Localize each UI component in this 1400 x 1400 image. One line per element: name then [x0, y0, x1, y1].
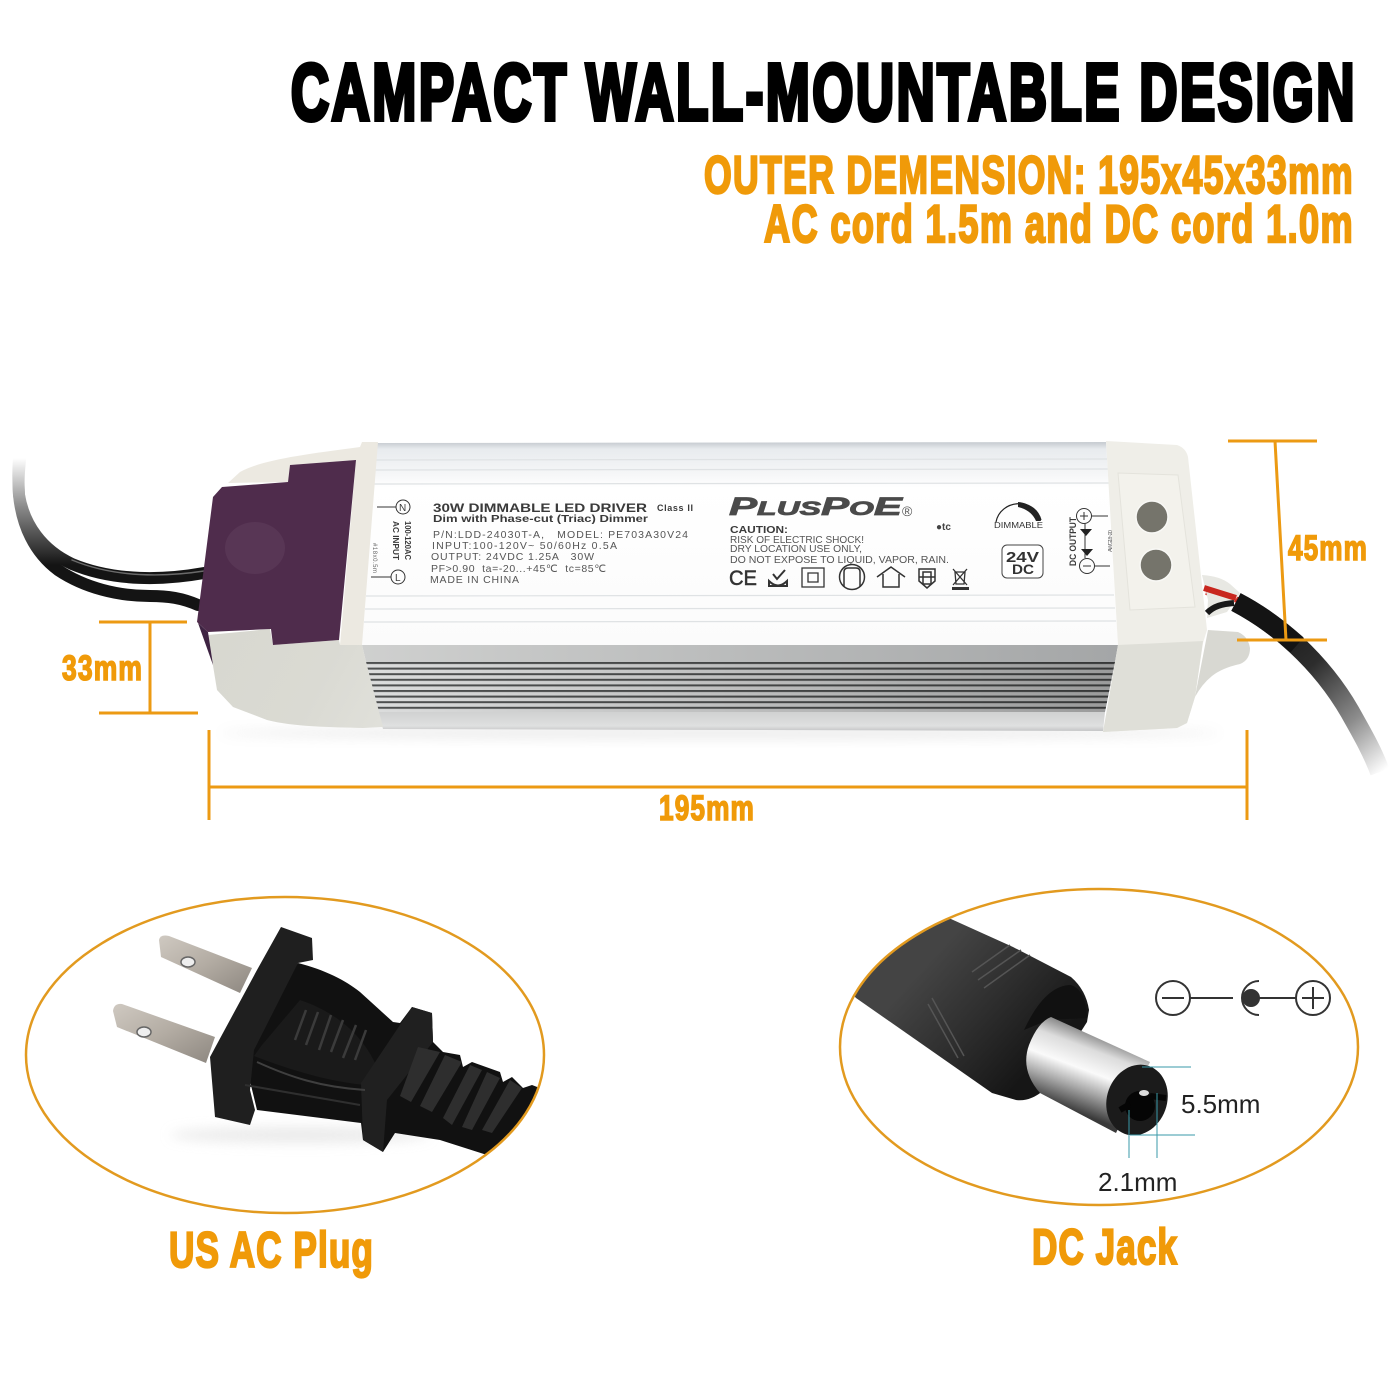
plug prong lower [113, 1004, 215, 1063]
jack ridge lines [928, 945, 1030, 1058]
label: AC input schematic: #18x0.5m [371, 543, 377, 573]
cable hole lower [1140, 549, 1172, 581]
dimension: 195mm length: 195mm [659, 789, 755, 828]
plug grip ribs [295, 1010, 366, 1060]
right cap mounting tab [1195, 630, 1250, 697]
icon: crossed-out bin [953, 569, 967, 585]
label: caution text: RISK OF ELECTRIC SHOCK! [730, 535, 864, 546]
label: 24V DC badge [1002, 545, 1043, 578]
icon: class II square [802, 568, 824, 587]
label: AC input schematic: AC INPUT [391, 521, 401, 561]
label: dimmable badge: DIMMABLE [994, 520, 1043, 530]
fin shading [366, 662, 1115, 712]
subtitle: dimensions and cord lengths [704, 146, 1354, 254]
icon: thermal mark [919, 569, 935, 588]
jack measurement guide lines [1129, 1067, 1195, 1158]
dimension: 45mm width: 45mm [1288, 529, 1368, 568]
right cap front shading [1103, 641, 1203, 732]
strain relief ribs [400, 1047, 522, 1133]
icon: polarity symbol [1156, 981, 1330, 1015]
aluminium grey band [362, 645, 1118, 662]
left cap upper part [228, 442, 378, 645]
logo registered mark: ® [902, 503, 913, 519]
label: product specification text: Class II [657, 503, 693, 513]
label: 2.1mm: 2.1mm [1098, 1167, 1177, 1197]
left cap lower part [208, 629, 383, 728]
dimension: 45mm width [1228, 441, 1368, 640]
icon: indoor house [877, 567, 905, 587]
label: AC input schematic: 100-120AC [403, 521, 413, 560]
label: product specification text: INPUT:100-120V~ 50/60Hz 0.5A [432, 540, 617, 552]
label: product specification text: Dim with Phase-cut (Triac) Dimmer [433, 513, 648, 525]
label: DC output schematic [1068, 508, 1114, 574]
jack ellipse outline [840, 889, 1358, 1205]
plug prong upper [159, 936, 252, 993]
dimension: 33mm height: 33mm [62, 649, 143, 688]
label: 5.5mm: 5.5mm [1181, 1089, 1260, 1119]
label: certification icons [729, 564, 969, 590]
plug black body [210, 927, 545, 1155]
label: product specification text: P/N:LDD-24030T-A, MODEL: PE703A30V24 [433, 529, 688, 541]
label: PlusPoE logo: P LUS P O E [729, 493, 904, 521]
right cap inset panel [1118, 473, 1195, 610]
aluminium top face [362, 442, 1118, 645]
tc point mark: ●tc [936, 522, 951, 533]
label: AC input schematic: L [395, 573, 401, 584]
label: product specification text: MADE IN CHINA [430, 574, 519, 586]
label: product specification text: PF>0.90 ta=-20...+45℃ tc=85℃ [431, 563, 606, 575]
icon: CE mark: CE [729, 567, 757, 590]
dimension: 195mm length [209, 730, 1247, 828]
driver body [197, 441, 1207, 732]
purple side shadow [198, 623, 213, 665]
icon: bin underline [952, 587, 969, 590]
label: caution text: CAUTION: [730, 524, 788, 536]
label: DC Jack: DC Jack [1032, 1219, 1178, 1275]
jack tip [1096, 1056, 1178, 1144]
plug ellipse outline [26, 897, 544, 1213]
label: AC input schematic: N [399, 503, 406, 514]
label: caution text: DO NOT EXPOSE TO LIQUID, VAPOR, RAIN. [730, 555, 949, 566]
label: caution text [730, 524, 949, 566]
purple connector cover [197, 460, 356, 645]
label: US AC Plug: US AC Plug [169, 1222, 374, 1278]
shadow under driver [220, 728, 1220, 738]
right end cap [1103, 441, 1207, 732]
label: 24V DC badge: DC [1012, 561, 1034, 577]
label: product specification text: OUTPUT: 24VDC 1.25A 30W [431, 551, 594, 563]
AC cable, left side [18, 458, 204, 605]
label: AC input schematic [371, 500, 413, 584]
icon: circled enclosure [840, 564, 864, 590]
panel: US AC plug [26, 897, 545, 1213]
DC cable, right side [1206, 592, 1380, 772]
aluminium lower silver edge [378, 712, 1105, 731]
jack black body [854, 918, 1089, 1100]
jack metal barrel [1026, 1017, 1150, 1133]
label: dimmable badge [994, 502, 1043, 530]
label: product specification text [430, 503, 693, 586]
panel: DC jack [840, 889, 1358, 1205]
red wire stub [1204, 588, 1236, 598]
black wire stub [1207, 603, 1234, 613]
jack collar [1024, 985, 1087, 1030]
label: product specification text: 30W DIMMABLE LED DRIVER [433, 503, 648, 515]
cable hole upper [1136, 501, 1168, 533]
plug shadow [170, 1127, 430, 1143]
aluminium front fins [366, 662, 1115, 712]
black cable sheath [1236, 602, 1297, 645]
label: DC output schematic: DC OUTPUT [1068, 517, 1078, 566]
cover thumb dimple [225, 522, 285, 574]
cable grommet [1202, 575, 1240, 618]
icon: furniture mark [769, 570, 787, 586]
label: 24V DC badge: 24V [1006, 549, 1039, 566]
dimension: 33mm height [62, 622, 198, 713]
aluminium grooves [364, 459, 1116, 622]
label: DC output schematic: AWG18~20 [1108, 530, 1114, 552]
label: caution text: DRY LOCATION USE ONLY, [730, 544, 862, 555]
